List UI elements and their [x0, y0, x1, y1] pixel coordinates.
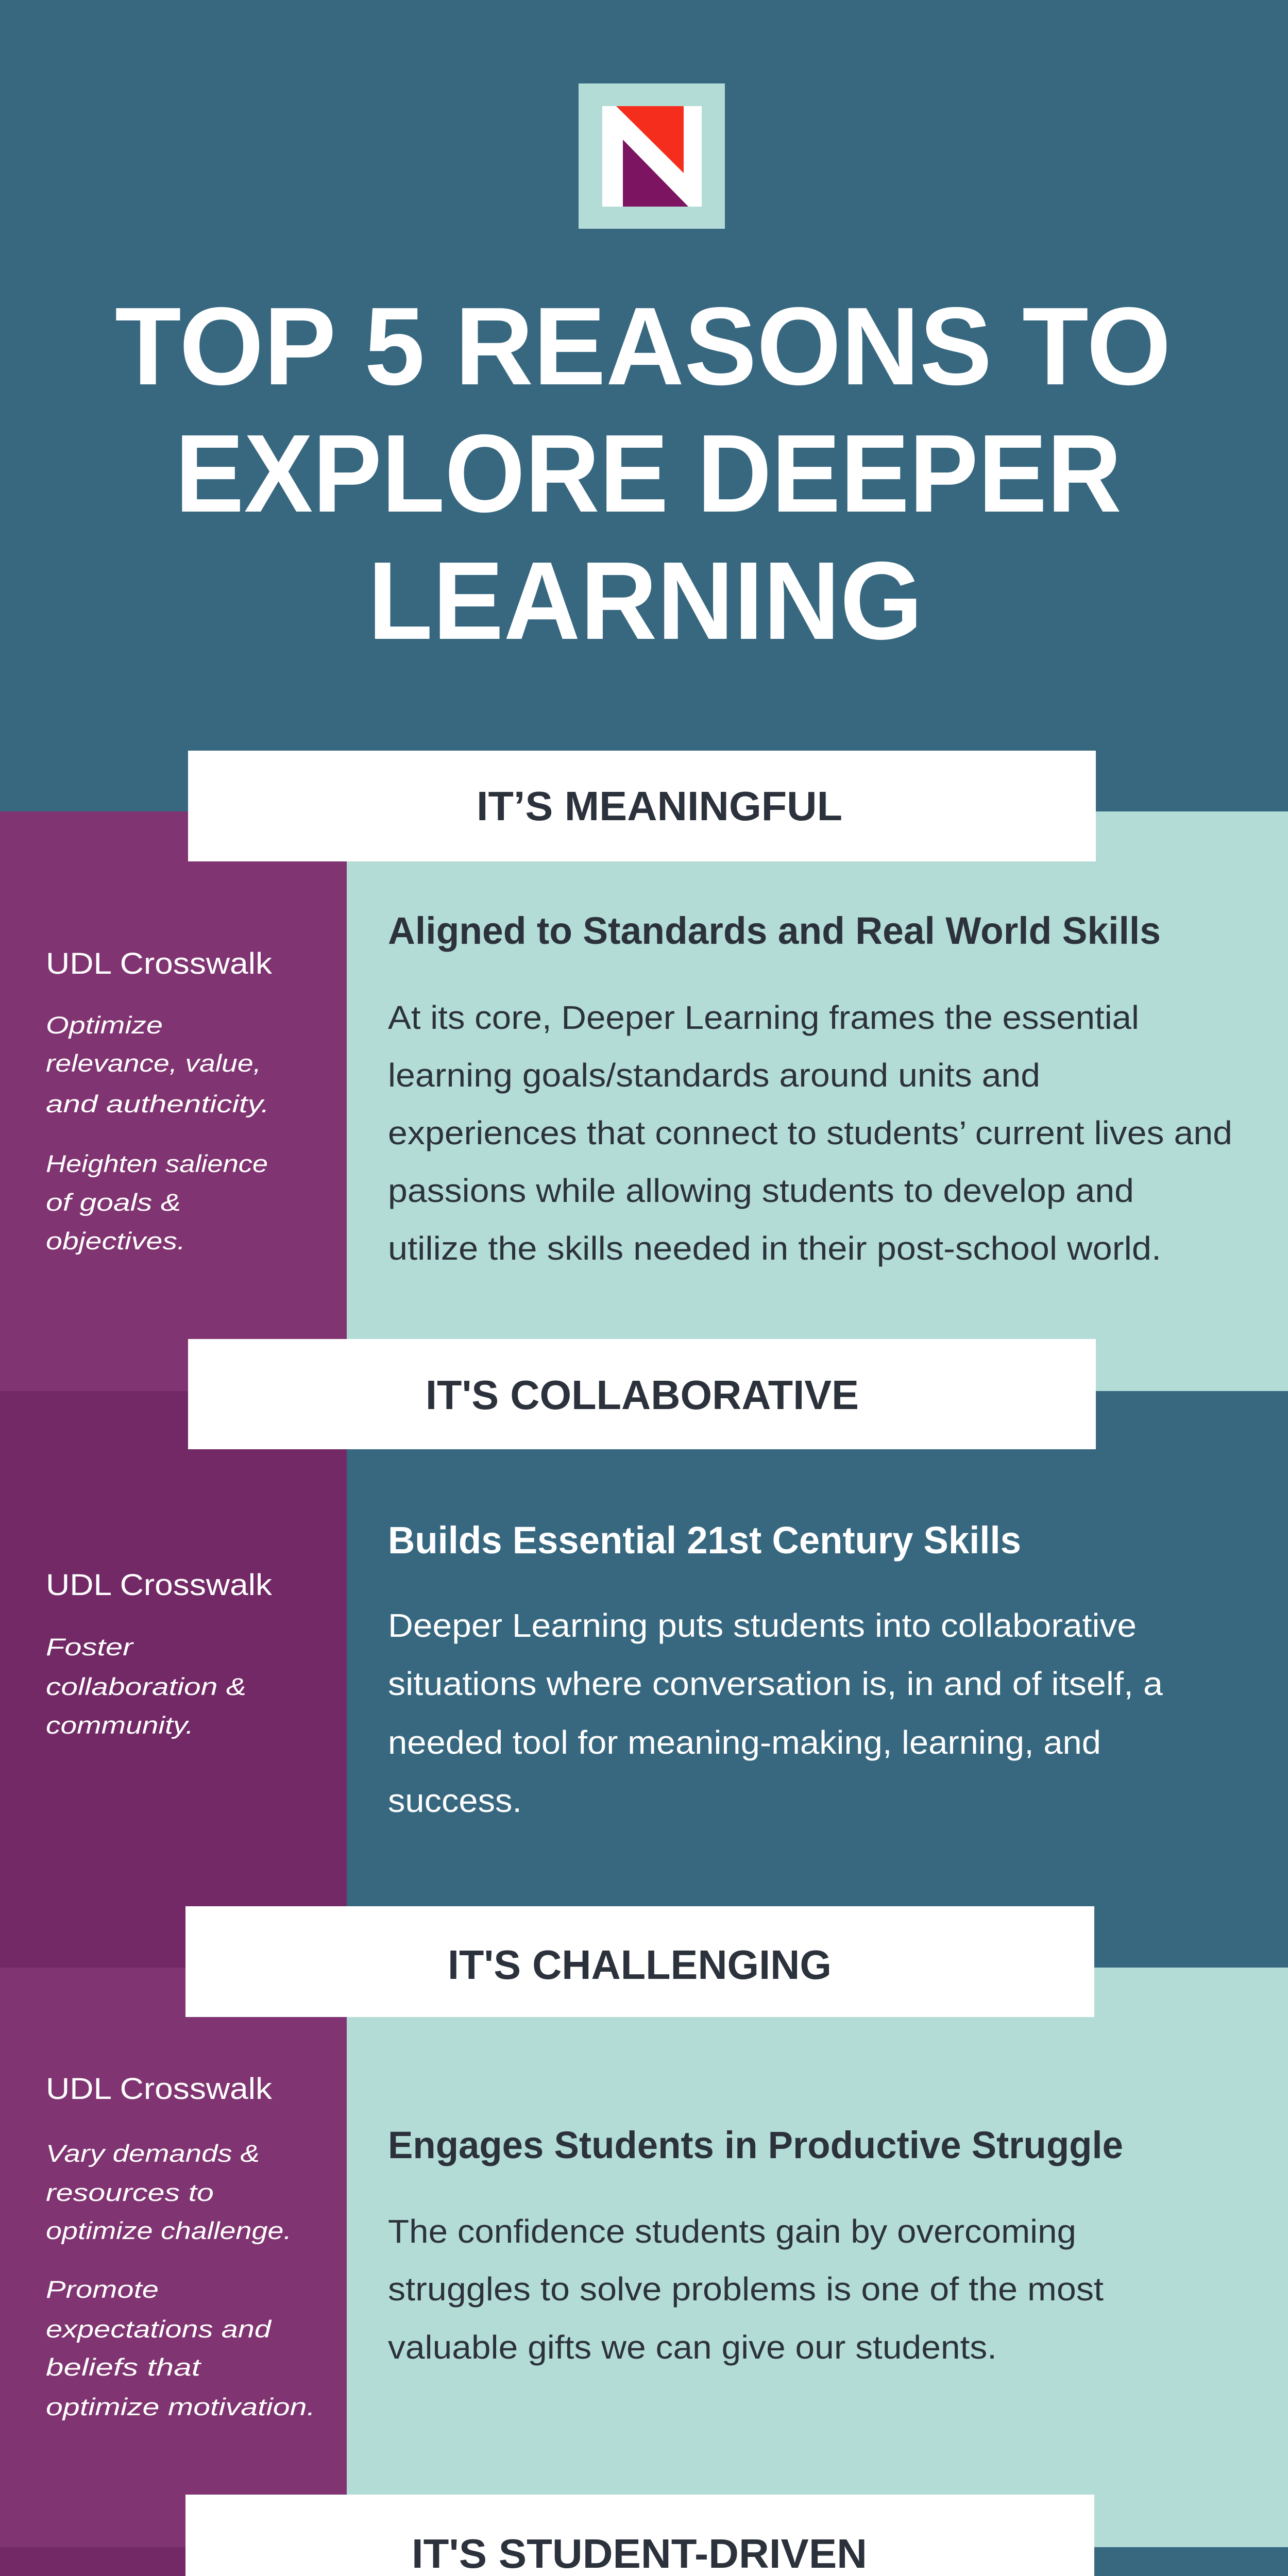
heading: it's student-driven: IT'S STUDENT-DRIVEN [412, 2531, 867, 2576]
udl crosswalk 3: beliefs that [46, 2353, 202, 2381]
panel: it's collaborative [0, 1391, 1288, 1968]
udl crosswalk 1: Optimize [46, 1011, 163, 1039]
heading: it's collaborative: IT'S COLLABORATIVE [426, 1372, 859, 1418]
heading: it's student-driven [185, 2495, 1094, 2576]
body 3 [388, 2213, 1104, 2366]
udl crosswalk 2: Foster [46, 1633, 134, 1660]
body 1: utilize the skills needed in their post-school world. [388, 1230, 1161, 1267]
heading: it's challenging: IT'S CHALLENGING [448, 1942, 832, 1988]
udl crosswalk 2: UDL Crosswalk [46, 1568, 273, 1602]
panel: it's meaningful [0, 811, 1288, 1391]
panel: it's student-driven [0, 2547, 1288, 2576]
udl crosswalk 2: collaboration & [46, 1673, 246, 1700]
udl crosswalk 1 [46, 947, 273, 1255]
udl crosswalk 1: and authenticity. [46, 1090, 269, 1117]
body 2: Deeper Learning puts students into collaborative [388, 1607, 1137, 1644]
subheading 1: Aligned to Standards and Real World Skills [388, 909, 1161, 952]
body 3: struggles to solve problems is one of the most [388, 2270, 1104, 2308]
udl crosswalk 1: of goals & [46, 1189, 181, 1216]
body 1: experiences that connect to students’ current lives and [388, 1114, 1232, 1151]
udl crosswalk 2: community. [46, 1711, 194, 1739]
body 2 [388, 1607, 1163, 1819]
panel: it's challenging [0, 1968, 1288, 2547]
body 3: valuable gifts we can give our students. [388, 2329, 997, 2366]
body 2: needed tool for meaning-making, learning, and [388, 1724, 1101, 1761]
heading: it's challenging [185, 1906, 1094, 2017]
title [115, 284, 1171, 663]
udl crosswalk 3: optimize challenge. [46, 2217, 292, 2244]
heading: it's collaborative [188, 1339, 1096, 1449]
udl crosswalk 1: UDL Crosswalk [46, 947, 273, 980]
heading: it's meaningful: IT’S MEANINGFUL [477, 783, 842, 829]
body 1: passions while allowing students to develop and [388, 1172, 1134, 1209]
body 3: The confidence students gain by overcoming [388, 2213, 1076, 2250]
subheading 3: Engages Students in Productive Struggle [388, 2124, 1123, 2166]
udl crosswalk 1: relevance, value, [46, 1049, 261, 1077]
udl crosswalk 1: Heighten salience [46, 1150, 268, 1177]
body 2: success. [388, 1782, 522, 1819]
body 2: situations where conversation is, in and of itself, a [388, 1665, 1163, 1702]
subheading 2: Builds Essential 21st Century Skills [388, 1519, 1021, 1562]
logo [579, 83, 725, 229]
title: LEARNING [368, 538, 923, 663]
title: TOP 5 REASONS TO [115, 284, 1171, 408]
udl crosswalk 3: Promote [46, 2276, 159, 2303]
udl crosswalk 3: UDL Crosswalk [46, 2072, 273, 2106]
udl crosswalk 3: Vary demands & [46, 2140, 260, 2167]
udl crosswalk 2 [46, 1568, 273, 1739]
udl crosswalk 1: objectives. [46, 1227, 185, 1255]
heading: it's meaningful [188, 751, 1096, 861]
body 1: learning goals/standards around units and [388, 1057, 1040, 1094]
udl crosswalk 3: resources to [46, 2179, 214, 2206]
body 1 [388, 999, 1232, 1267]
udl crosswalk 3: expectations and [46, 2315, 272, 2343]
title: EXPLORE DEEPER [175, 411, 1122, 535]
udl crosswalk 3 [46, 2072, 315, 2420]
udl crosswalk 3: optimize motivation. [46, 2393, 315, 2420]
body 1: At its core, Deeper Learning frames the essential [388, 999, 1139, 1036]
